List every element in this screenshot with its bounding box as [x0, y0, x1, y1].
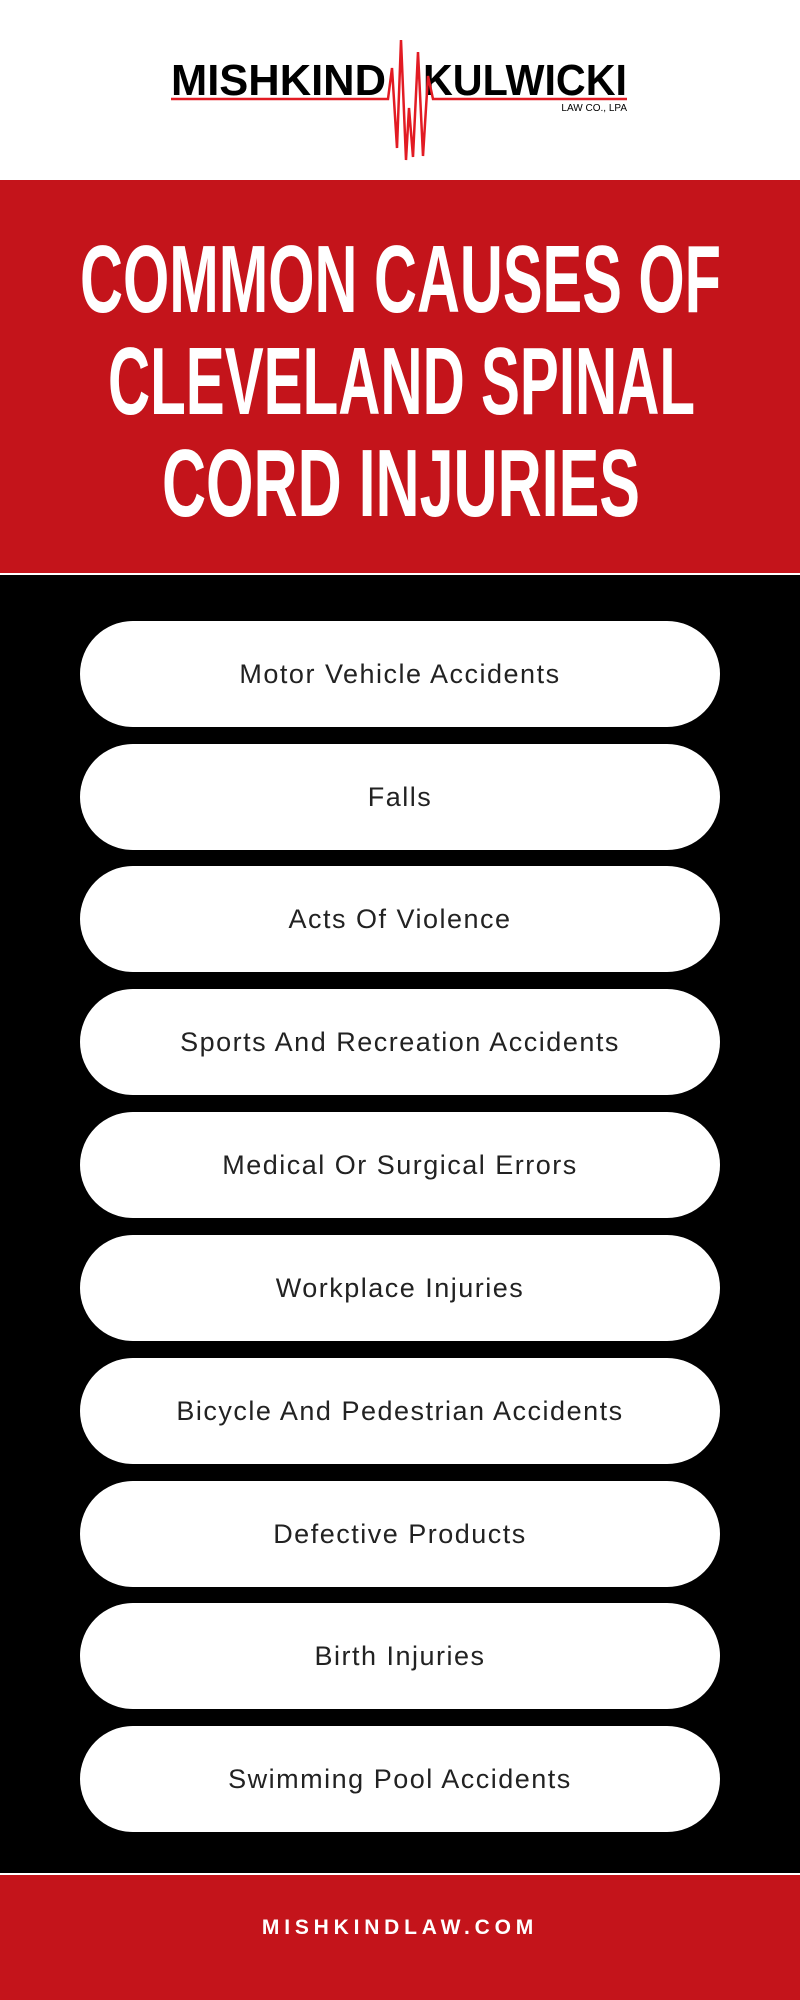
cause 7: [80, 1358, 720, 1464]
footer url: MISHKINDLAW.COM: [262, 1916, 538, 1939]
title: [80, 226, 721, 537]
logo: [171, 40, 627, 160]
cause 9: [80, 1603, 720, 1709]
title banner: [0, 180, 800, 573]
cause 10: Swimming Pool Accidents: [228, 1764, 572, 1794]
cause 1: Motor Vehicle Accidents: [239, 658, 561, 688]
logo: KULWICKI: [423, 56, 627, 105]
cause 3: Acts Of Violence: [288, 904, 512, 934]
cause 2: Falls: [368, 782, 432, 812]
cause 2: [80, 744, 720, 850]
cause 7: Bicycle And Pedestrian Accidents: [176, 1396, 624, 1426]
cause 3: [80, 866, 720, 972]
cause 8: [80, 1481, 720, 1587]
footer: [0, 1875, 800, 2000]
cause 9: Birth Injuries: [314, 1640, 486, 1670]
cause 6: Workplace Injuries: [276, 1272, 524, 1302]
cause 4: [80, 989, 720, 1095]
cause 10: [80, 1726, 720, 1832]
cause 5: Medical Or Surgical Errors: [222, 1150, 578, 1180]
list of causes: [80, 621, 720, 1832]
header: logo area: [0, 0, 800, 180]
logo: LAW CO., LPA: [561, 103, 627, 114]
cause 8: Defective Products: [273, 1518, 527, 1548]
cause 6: [80, 1235, 720, 1341]
cause 4: Sports And Recreation Accidents: [180, 1026, 620, 1056]
cause 5: [80, 1112, 720, 1218]
cause 1: [80, 621, 720, 727]
logo: MISHKIND: [171, 56, 386, 105]
